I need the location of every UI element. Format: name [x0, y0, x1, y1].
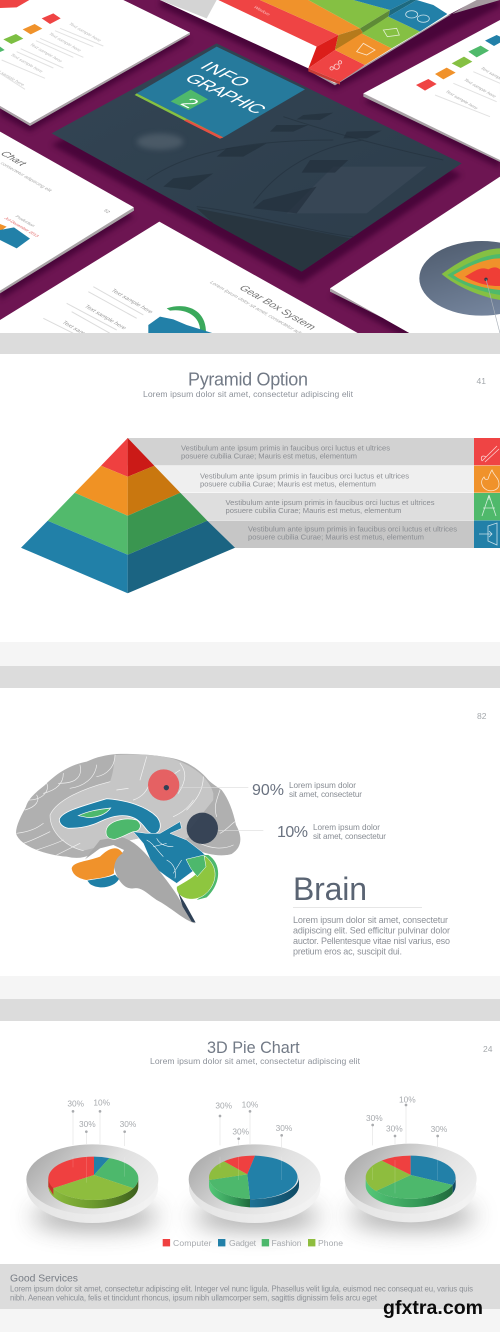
slide: top left: Text sample here: [28, 43, 64, 63]
heading: Pyramid Option: [143, 370, 354, 399]
pie callout lines and labels: 30%: [79, 1119, 96, 1129]
slide: top left: Text sample here: [9, 53, 45, 73]
pie 3: [345, 1144, 477, 1228]
cover title block: 2: [175, 96, 204, 111]
chart: pyramid: [21, 438, 235, 593]
pie callout lines and labels: 30%: [276, 1123, 293, 1133]
text block: Brain description: [293, 915, 450, 956]
slide: top left: Text sample here: [47, 32, 83, 52]
panel: pyramid text bars: posuere cubilia Curae; Mauris est metus, elementum: [248, 532, 424, 542]
stat: 10%: Lorem ipsum dolor: [313, 823, 380, 832]
illustration: brain: [16, 754, 263, 923]
panel: Good Services: Good Services: [10, 1274, 78, 1284]
pie callout lines and labels: 30%: [431, 1124, 448, 1134]
cover title block: [135, 47, 305, 139]
stat: 90%: Lorem ipsum dolor: [289, 781, 356, 790]
slide: left middle: 52: [102, 209, 112, 214]
panel: pyramid text bars: Vestibulum ante ipsum primis in faucibus orci luctus et ultrices: [226, 498, 435, 507]
text block: Brain description: auctor. Pellentesque vitae nisl varius, eso: [293, 936, 450, 946]
slide: left middle: Production: [14, 215, 37, 228]
panel: Good Services: nibh. Aenean vehicula, felis et tincidunt rhoncus, ipsum nibh ullamcorper sem, sagittis dignissim felis arcu eget: [10, 1294, 378, 1302]
stat: 10%: 10%: [277, 824, 308, 841]
pie callout lines and labels: 10%: [93, 1098, 111, 1108]
pie callout lines and labels: 10%: [399, 1094, 416, 1104]
slide shadows: [0, 0, 500, 340]
slide: top colored bands: Wisdom: [252, 5, 272, 16]
legend: Computer: [173, 1238, 212, 1248]
slide: gear box system: [0, 222, 358, 340]
page number 24: 24: [483, 1044, 493, 1054]
slide: left middle: Jul-December 2013: [3, 216, 41, 238]
heading: Pyramid Option: Lorem ipsum dolor sit amet, consectetur adipiscing elit: [143, 389, 354, 399]
panel: pyramid text bars: [127, 438, 474, 548]
panel: Good Services: [0, 1264, 500, 1332]
slide: right lower with layered chart: [330, 177, 500, 333]
heading: 3D Pie Chart: 3D Pie Chart: [207, 1039, 300, 1057]
slide: gear box system: Text sample here: [109, 289, 154, 315]
slide: left middle: [0, 132, 134, 293]
panel: pyramid text bars: Vestibulum ante ipsum primis in faucibus orci luctus et ultrices: [248, 524, 457, 534]
stat: 10%: sit amet, consectetur: [313, 832, 386, 841]
band: section separators: [0, 333, 500, 1021]
text block: Brain description: pretium eros ac, suscipit dui.: [293, 946, 402, 956]
pie callout lines and labels: 30%: [366, 1113, 383, 1123]
panel: pyramid text bars: posuere cubilia Curae; Mauris est metus, elementum: [200, 480, 376, 488]
slide: top colored bands: [160, 0, 500, 85]
central cover slide: [52, 43, 462, 272]
panel: pyramid text bars: Vestibulum ante ipsum primis in faucibus orci luctus et ultrices: [181, 444, 390, 452]
slide: right upper: [363, 20, 500, 162]
page number 82: 82: [477, 711, 487, 721]
chart: 3D pies: [26, 1094, 477, 1229]
text block: Brain description: Lorem ipsum dolor sit amet, consectetur: [293, 915, 448, 925]
panel: pyramid text bars: Vestibulum ante ipsum primis in faucibus orci luctus et ultrices: [200, 472, 409, 480]
heading: Brain: [293, 871, 422, 908]
watermark: gfxtra.com: gfxtra.com: [383, 1297, 483, 1319]
panel: pyramid text bars: posuere cubilia Curae; Mauris est metus, elementum: [181, 452, 357, 460]
legend: Fashion: [272, 1238, 302, 1248]
cover title block: GRAPHIC: [180, 71, 272, 116]
stat: 90%: [252, 781, 362, 799]
stat: 90%: 90%: [252, 782, 284, 799]
panel: pyramid text bars: posuere cubilia Curae; Mauris est metus, elementum: [226, 506, 402, 515]
icons: pyramid colored tabs: [474, 438, 500, 548]
heading: 3D Pie Chart: [150, 1039, 361, 1066]
text block: Brain description: adipiscing elit. Sed efficitur pulvinar dolor: [293, 926, 450, 936]
page number 41: 41: [476, 376, 486, 386]
cover title block: INFO: [196, 59, 256, 89]
slide: gear box system: Lorem ipsum dolor sit amet, consectetur adipi: [208, 281, 306, 337]
slide: gear box system: Text sample: [60, 321, 94, 340]
pie callout lines and labels: 30%: [120, 1119, 137, 1129]
pie callout lines and labels: 30%: [386, 1124, 403, 1134]
slide: gear box system: Gear Box System: [236, 284, 319, 332]
pie callout lines and labels: 30%: [67, 1099, 85, 1109]
pie callout lines and labels: 30%: [232, 1127, 250, 1137]
pie callout lines and labels: 10%: [242, 1100, 259, 1110]
slide: top left: [0, 0, 190, 126]
pie callout lines and labels: 30%: [215, 1100, 233, 1110]
heading: 3D Pie Chart: Lorem ipsum dolor sit amet, consectetur adipiscing elit: [150, 1056, 361, 1066]
pie 2: [189, 1144, 321, 1229]
legend: Phone: [318, 1238, 343, 1248]
slide: gear box system: Text sample here: [82, 305, 128, 331]
slide: right upper: Text sample here: [444, 90, 480, 110]
heading: Brain: Brain: [293, 871, 367, 907]
heading: Pyramid Option: Pyramid Option: [188, 370, 308, 390]
pie 1: [26, 1144, 158, 1229]
slide: right upper: Text sample here: [462, 78, 498, 98]
legend: [163, 1238, 343, 1248]
stat: 90%: sit amet, consectetur: [289, 790, 362, 799]
panel: isometric slides mockup: [0, 0, 500, 340]
legend: Gadget: [229, 1238, 257, 1248]
panel: Good Services: Lorem ipsum dolor sit amet, consectetur adipiscing elit. Integer vel nunc ligula. Phasellus velit ligula, euismod nec consequat eu, varius quis: [10, 1284, 473, 1294]
slide: top left: Text sample here: [67, 22, 103, 42]
pie callout lines and labels: [67, 1094, 448, 1193]
stat: 10%: [277, 823, 386, 841]
